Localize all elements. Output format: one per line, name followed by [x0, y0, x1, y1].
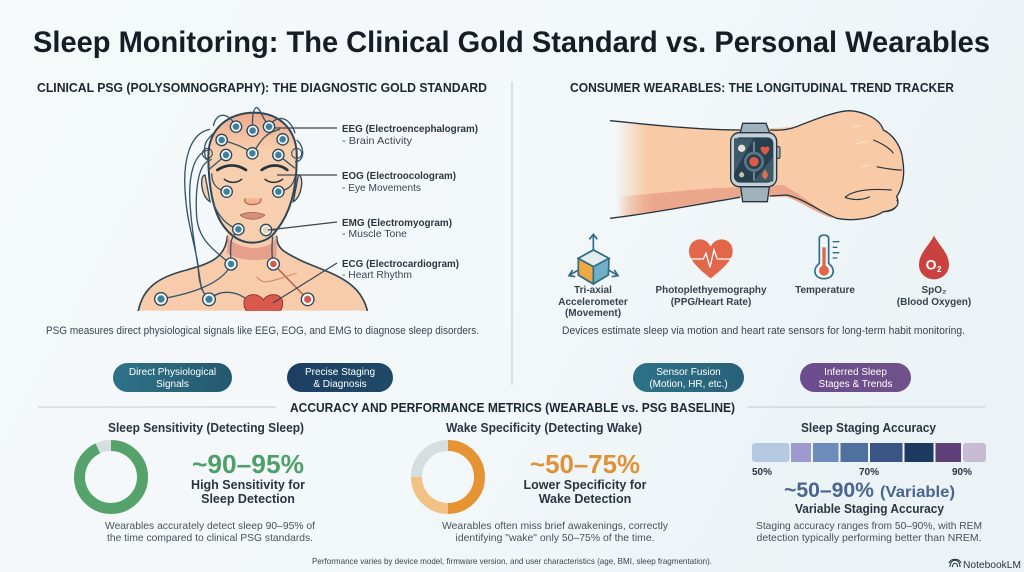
callout: EEG: - Brain Activity — [342, 135, 413, 147]
callout: EMG: - Muscle Tone — [342, 228, 407, 240]
heading: clinical PSG: CLINICAL PSG (POLYSOMNOGRAPHY): THE DIAGNOSTIC GOLD STANDARD — [37, 80, 487, 95]
description: PSG: PSG measures direct physiological signals like EEG, EOG, and EMG to diagnose sleep disorders. — [46, 325, 479, 337]
pill: precise staging: Precise Staging — [305, 367, 375, 378]
label: temperature: Temperature — [795, 285, 855, 296]
icon: thermometer — [815, 235, 839, 279]
metric heading: Wake Specificity (Detecting Wake) — [446, 421, 642, 435]
callout: EEG: EEG (Electroencephalogram) — [342, 123, 478, 135]
metric description: Staging accuracy ranges from 50–90%, with REM — [756, 520, 982, 532]
label: accelerometer: Accelerometer — [558, 297, 628, 308]
callout: EMG: EMG (Electromyogram) — [342, 217, 452, 229]
title: Sleep Monitoring: The Clinical Gold Standard vs. Personal Wearables — [33, 26, 990, 59]
metric caption: High Sensitivity for — [191, 478, 305, 492]
metric description — [442, 520, 669, 544]
metric caption: Lower Specificity for — [524, 478, 647, 492]
metric value — [784, 479, 955, 502]
label: PPG: Photoplethyemography — [656, 285, 767, 296]
icon: SpO2 drop — [919, 236, 949, 279]
metric description: detection typically performing better than NREM. — [756, 532, 982, 544]
icon: SpO2 drop: O — [926, 256, 937, 272]
metric description: Wearables often miss brief awakenings, correctly — [442, 520, 669, 532]
metric description: Wearables accurately detect sleep 90–95% of — [105, 520, 315, 532]
illustration: head with electrodes — [138, 107, 367, 313]
range labels: 70% — [859, 467, 879, 478]
pill: precise staging — [287, 363, 393, 392]
callout: ECG: - Heart Rhythm — [342, 269, 412, 281]
metric caption — [524, 478, 647, 506]
panel: sleep staging accuracy — [752, 421, 986, 544]
panel: clinical PSG — [37, 80, 487, 392]
icon: PPG heart — [689, 239, 733, 278]
pill: sensor fusion — [633, 363, 744, 392]
metric description — [105, 520, 315, 544]
metric caption: Wake Detection — [539, 492, 631, 506]
callout lines — [268, 128, 337, 303]
panel: sleep sensitivity — [80, 421, 315, 544]
logo: NotebookLM: NotebookLM — [963, 559, 1021, 571]
label: SpO2 — [897, 285, 971, 308]
range labels — [752, 467, 972, 478]
pill: inferred sleep stages: Inferred Sleep — [824, 367, 887, 378]
callout: ECG: ECG (Electrocardiogram) — [342, 258, 459, 270]
callout: EOG: EOG (Electroocologram) — [342, 170, 456, 182]
label: accelerometer: (Movement) — [565, 308, 621, 319]
callout: EOG: - Eye Movements — [342, 182, 421, 194]
metric caption: Sleep Detection — [201, 492, 295, 506]
metric value: (Variable) — [880, 484, 955, 501]
section heading: accuracy metrics: ACCURACY AND PERFORMANCE METRICS (WEARABLE vs. PSG BASELINE) — [290, 401, 735, 415]
pill: direct physiological signals: Signals — [156, 379, 189, 390]
callout: ECG — [342, 258, 459, 281]
panel: consumer wearables — [558, 80, 971, 392]
pill: inferred sleep stages — [800, 363, 911, 392]
heading: consumer wearables: CONSUMER WEARABLES: THE LONGITUDINAL TREND TRACKER — [570, 80, 955, 95]
pill: sensor fusion: Sensor Fusion — [656, 367, 721, 378]
pill: inferred sleep stages: Stages & Trends — [819, 379, 892, 390]
donut chart: wake specificity — [416, 446, 480, 508]
pill: direct physiological signals — [113, 363, 232, 392]
metric value: ~50–75% — [530, 449, 640, 479]
metric value: ~90–95% — [192, 449, 304, 479]
description: wearables: Devices estimate sleep via motion and heart rate sensors for long-term habit monitoring. — [562, 325, 965, 337]
metric heading: Sleep Sensitivity (Detecting Sleep) — [108, 421, 304, 435]
callout: EOG — [342, 170, 456, 194]
illustration: wrist with smartwatch — [610, 111, 904, 220]
callout: EMG — [342, 217, 452, 240]
label: PPG — [656, 285, 767, 308]
range labels: 90% — [952, 467, 972, 478]
label: PPG: (PPG/Heart Rate) — [671, 297, 751, 308]
metric heading: Sleep Staging Accuracy — [801, 421, 936, 435]
label: SpO2: SpO₂ — [922, 285, 946, 296]
panel: wake specificity — [416, 421, 669, 544]
callout: EEG — [342, 123, 478, 147]
metric value: ~50–90% — [784, 479, 874, 502]
icon: SpO2 drop: 2 — [937, 265, 942, 274]
metric caption: Variable Staging Accuracy — [795, 502, 944, 516]
icon: accelerometer cube — [569, 234, 618, 284]
range bar — [752, 443, 986, 462]
footnote: Performance varies by device model, firmware version, and user characteristics (age, BMI, sleep fragmentation). — [312, 556, 712, 566]
metric caption — [191, 478, 305, 506]
pill: direct physiological signals: Direct Physiological — [129, 367, 216, 378]
metric description: the time compared to clinical PSG standards. — [107, 532, 313, 544]
vertical divider — [511, 82, 513, 385]
label: accelerometer: Tri-axial — [574, 285, 612, 296]
metric description — [756, 520, 982, 544]
label: SpO2: (Blood Oxygen) — [897, 297, 971, 308]
label: accelerometer — [558, 285, 628, 319]
pill: precise staging: & Diagnosis — [313, 379, 367, 390]
range labels: 50% — [752, 467, 772, 478]
pill: sensor fusion: (Motion, HR, etc.) — [649, 379, 728, 390]
donut chart: sleep sensitivity — [80, 446, 142, 508]
metric description: identifying "wake" only 50–75% of the time. — [456, 532, 654, 544]
